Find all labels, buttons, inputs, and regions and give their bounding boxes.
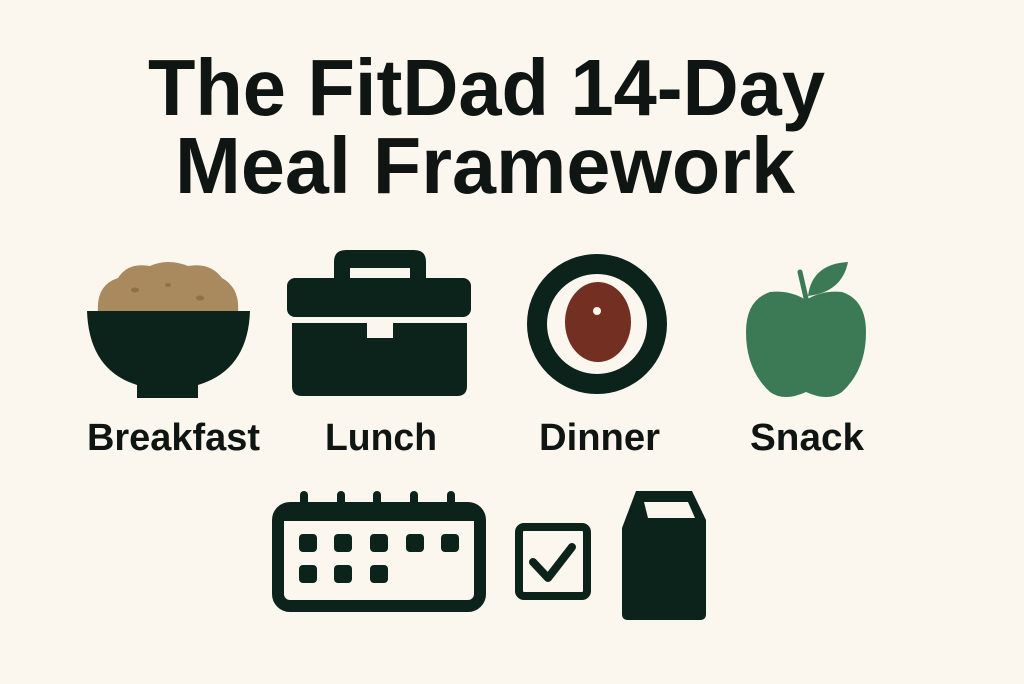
title: The FitDad 14-Day bbox=[148, 43, 825, 132]
title: Meal Framework bbox=[175, 121, 795, 210]
icon: checkbox bbox=[519, 527, 587, 596]
icon: breakfast bowl bbox=[87, 262, 250, 398]
icon: lunchbox bbox=[287, 250, 471, 396]
icon: apple bbox=[746, 262, 866, 397]
label: snack: Snack bbox=[750, 417, 865, 459]
label: breakfast: Breakfast bbox=[87, 417, 260, 459]
label: lunch: Lunch bbox=[325, 417, 437, 459]
label: dinner: Dinner bbox=[539, 417, 660, 459]
title bbox=[148, 43, 825, 210]
icon: calendar bbox=[278, 491, 480, 606]
icon: dinner plate bbox=[537, 264, 657, 384]
icon: milk carton bbox=[622, 491, 706, 620]
